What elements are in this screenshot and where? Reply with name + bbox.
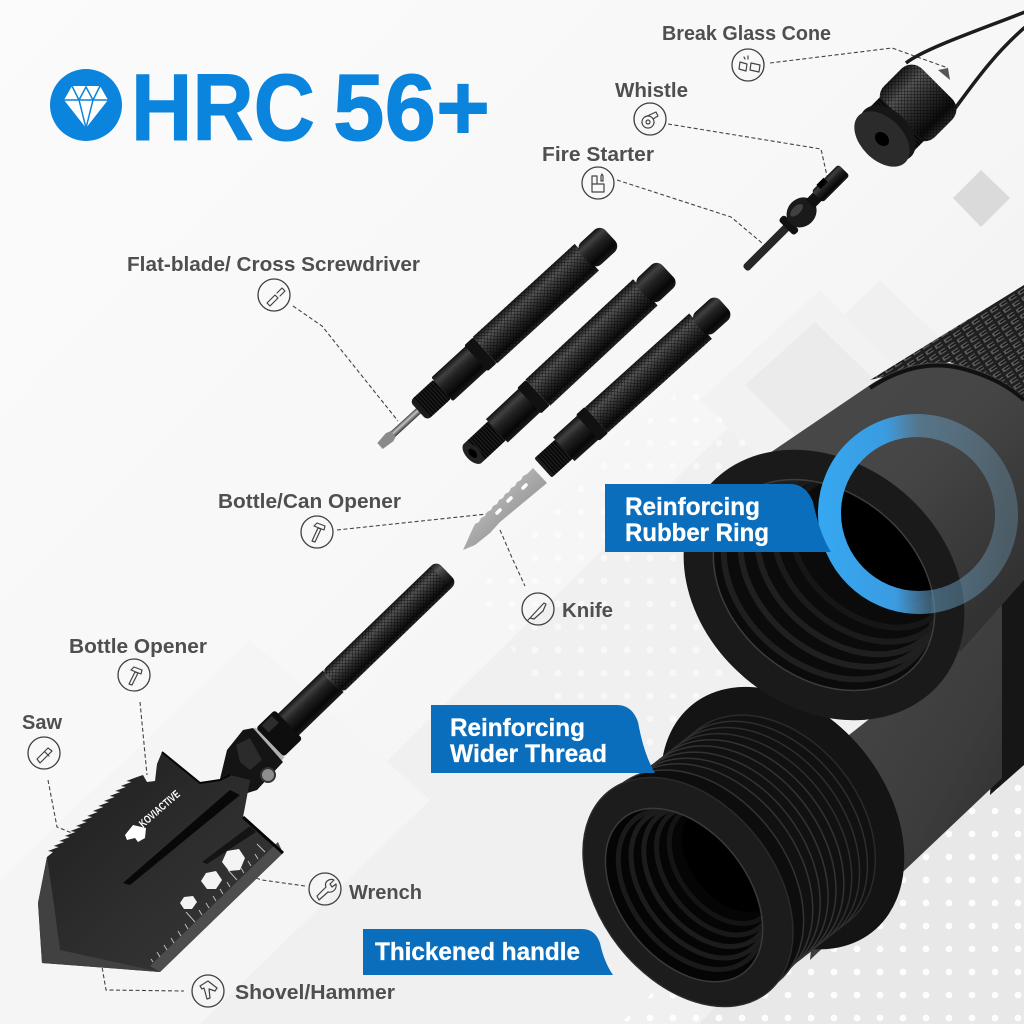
shovel handle xyxy=(252,556,461,760)
label: knife: Knife xyxy=(562,600,613,622)
label: saw xyxy=(22,712,62,769)
rim xyxy=(629,394,1019,776)
label: flat-blade / cross screwdriver xyxy=(127,254,420,311)
label: knife xyxy=(522,593,613,625)
label: wrench: Wrench xyxy=(349,882,422,904)
callout: thickened handle: Thickened handle xyxy=(375,938,580,966)
label: bottle/can opener xyxy=(218,491,401,548)
cone tip xyxy=(938,68,950,80)
label: shovel/hammer xyxy=(192,975,395,1007)
brand logo xyxy=(125,788,183,842)
label: break glass cone xyxy=(662,23,831,81)
collar xyxy=(611,639,955,997)
label: break glass cone: Break Glass Cone xyxy=(662,23,831,45)
label: whistle: Whistle xyxy=(615,80,688,102)
joint xyxy=(990,578,1024,795)
blade xyxy=(38,752,283,972)
blue ring highlight xyxy=(793,389,1024,639)
brand logo: KOVIACTIVE xyxy=(137,788,183,830)
label: whistle xyxy=(615,80,688,135)
label: wrench xyxy=(309,873,422,905)
wrench holes xyxy=(222,849,245,871)
large lower tube: wider thread xyxy=(582,580,1024,1008)
groove xyxy=(123,790,240,885)
bracket xyxy=(220,728,283,797)
label: shovel/hammer: Shovel/Hammer xyxy=(235,982,395,1004)
title: HRC 56+: 56+ xyxy=(333,55,490,161)
callout: reinforcing wider thread: Reinforcing xyxy=(450,714,585,742)
break glass cap with paracord xyxy=(842,10,1024,179)
title: HRC 56+ xyxy=(50,55,490,161)
callout: reinforcing wider thread xyxy=(431,705,655,773)
bevel xyxy=(38,857,160,972)
top edge xyxy=(162,752,230,783)
callout: reinforcing rubber ring: Reinforcing xyxy=(625,493,760,521)
paracord xyxy=(906,10,1024,133)
tube body xyxy=(810,605,1002,960)
label: bottle/can opener: Bottle/Can Opener xyxy=(218,491,401,513)
label: bottle opener xyxy=(69,636,207,691)
label: fire starter xyxy=(542,144,654,199)
threaded handle xyxy=(455,258,680,471)
shovel xyxy=(38,556,461,972)
label: saw: Saw xyxy=(22,712,62,734)
title: HRC 56+: HRC xyxy=(131,55,315,161)
cap body xyxy=(842,58,963,179)
knurled section xyxy=(870,285,1024,397)
whistle and fire starter xyxy=(735,160,854,279)
label: flat-blade / cross screwdriver: Flat-blade/ Cross Screwdriver xyxy=(127,254,420,276)
threaded neck and front face xyxy=(582,686,904,1008)
nut xyxy=(261,768,275,782)
icon: diamond badge xyxy=(50,69,122,141)
label: fire starter: Fire Starter xyxy=(542,144,654,166)
knife blade xyxy=(463,468,547,550)
callout: reinforcing wider thread: Wider Thread xyxy=(450,740,607,768)
callout: reinforcing rubber ring xyxy=(605,484,831,552)
tube body xyxy=(730,362,1024,652)
threaded bore xyxy=(714,484,932,690)
callout: reinforcing rubber ring: Rubber Ring xyxy=(625,519,769,547)
screwdriver handle xyxy=(368,222,623,459)
label: bottle opener: Bottle Opener xyxy=(69,636,207,658)
ruler xyxy=(151,844,265,962)
callout: thickened handle xyxy=(363,929,613,975)
knife handle xyxy=(463,292,736,550)
large upper tube: rubber ring xyxy=(684,285,1024,720)
